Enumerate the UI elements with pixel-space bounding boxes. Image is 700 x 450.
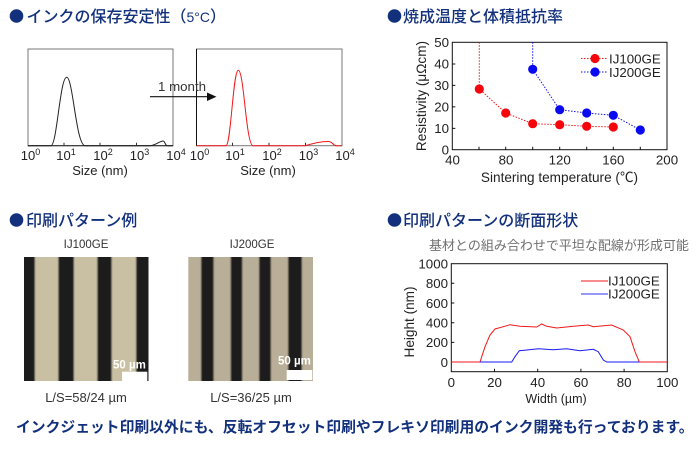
print sample: IJ200GE: IJ200GE [230,239,275,251]
chart: size distribution after one month: 10 [299,148,313,163]
chart: size distribution after one month: 2 [277,147,282,157]
chart: height profile: 60 [574,375,588,390]
chart: size distribution before storage: 10 [93,148,108,163]
footer message: インクジェット印刷以外にも、反転オフセット印刷やフレキソ印刷用のインク開発も行っております。 [16,418,694,436]
chart: size distribution after one month: 10 [335,148,350,163]
legend: IJ200GE [609,65,661,80]
heading: cross-section profile: 印刷パターンの断面形状 [403,212,578,230]
print sample: IJ100GE: L/S=58/24 µm [45,390,127,405]
chart: size distribution after one month [190,49,355,178]
chart: height profile: Height (nm) [402,286,417,358]
chart: size distribution after one month: 10 [225,148,240,163]
chart: resistivity vs sintering temperature: 120 [549,152,571,168]
chart: resistivity vs sintering temperature: 10 [434,121,449,136]
chart: height profile: 800 [426,276,448,291]
legend [581,52,661,80]
chart: size distribution before storage [21,49,186,178]
chart: resistivity vs sintering temperature: 80 [499,152,513,168]
chart: size distribution after one month: 10 [190,148,204,163]
scale bar 50 µm [278,356,312,380]
chart: height profile [402,256,678,406]
chart: height profile: Width (µm) [525,392,587,406]
scale bar 50 µm: 50 µm [278,356,311,368]
chart: size distribution before storage: 3 [144,147,149,157]
legend: IJ100GE [608,274,660,288]
chart: size distribution before storage: 0 [35,147,40,157]
print sample: IJ200GE [182,239,319,405]
chart: size distribution after one month: 0 [204,147,209,157]
curve: IJ200GE [480,349,639,362]
chart: size distribution after one month: Size (nm) [240,163,296,178]
curve: IJ100GE [451,324,667,362]
chart: height profile: 100 [656,375,678,390]
chart: height profile: 400 [426,316,448,330]
series: IJ200GE [528,42,645,135]
chart: size distribution before storage: 10 [56,148,71,163]
heading: print pattern examples: 印刷パターン例 [26,212,137,230]
chart: resistivity vs sintering temperature [414,35,678,185]
chart: size distribution before storage: Size (nm) [72,163,128,178]
heading: ink storage stability: インクの保存安定性（5°C） [26,8,226,26]
chart: resistivity vs sintering temperature: 50 [434,35,449,50]
chart: size distribution before storage: 1 [71,147,76,157]
print sample: IJ100GE: IJ100GE [64,239,109,251]
chart: height profile: 200 [426,335,448,350]
chart: resistivity vs sintering temperature: Sintering temperature (℃) [481,170,638,185]
print sample: IJ200GE: L/S=36/25 µm [210,390,292,405]
chart: size distribution before storage: 4 [181,147,186,157]
chart: size distribution after one month: 10 [262,148,277,163]
chart: height profile: 600 [426,296,448,311]
legend: IJ200GE [608,286,660,302]
legend: IJ100GE [609,52,661,66]
chart: resistivity vs sintering temperature: 20 [434,100,449,114]
chart: size distribution before storage: 2 [108,147,113,157]
arrow: 1 month: 1 month [158,79,206,94]
chart: resistivity vs sintering temperature: 200 [656,152,678,168]
chart: size distribution before storage: 10 [166,148,181,163]
series: IJ100GE [475,42,618,132]
chart: height profile: 0 [448,375,455,390]
chart: resistivity vs sintering temperature: 160 [602,152,624,168]
note: flat wiring: 基材との組み合わせで平坦な配線が形成可能 [429,238,689,253]
chart: resistivity vs sintering temperature: 30 [434,78,449,93]
chart: resistivity vs sintering temperature: 40 [445,152,460,168]
chart: resistivity vs sintering temperature: 40 [434,56,449,72]
arrow: 1 month [150,79,216,101]
chart: size distribution after one month: 1 [240,147,245,157]
chart: resistivity vs sintering temperature: 0 [442,142,449,158]
chart: resistivity vs sintering temperature: Resistivity (μΩcm) [414,41,429,151]
chart: size distribution before storage: 10 [21,148,35,163]
chart: height profile: 20 [487,375,502,390]
chart: size distribution before storage: 10 [130,148,144,163]
legend [581,274,660,302]
heading: sintering temperature and resistivity: 焼成温度と体積抵抗率 [403,8,563,26]
scale bar 50 µm [113,360,147,381]
print sample: IJ100GE [18,239,154,405]
scale bar 50 µm: 50 µm [113,360,146,372]
chart: height profile: 40 [530,375,545,390]
chart: height profile: 1000 [418,256,448,272]
chart: size distribution after one month: 4 [350,147,355,157]
chart: size distribution after one month: 3 [313,147,318,157]
chart: height profile: 0 [441,355,448,370]
chart: height profile: 80 [617,375,631,390]
